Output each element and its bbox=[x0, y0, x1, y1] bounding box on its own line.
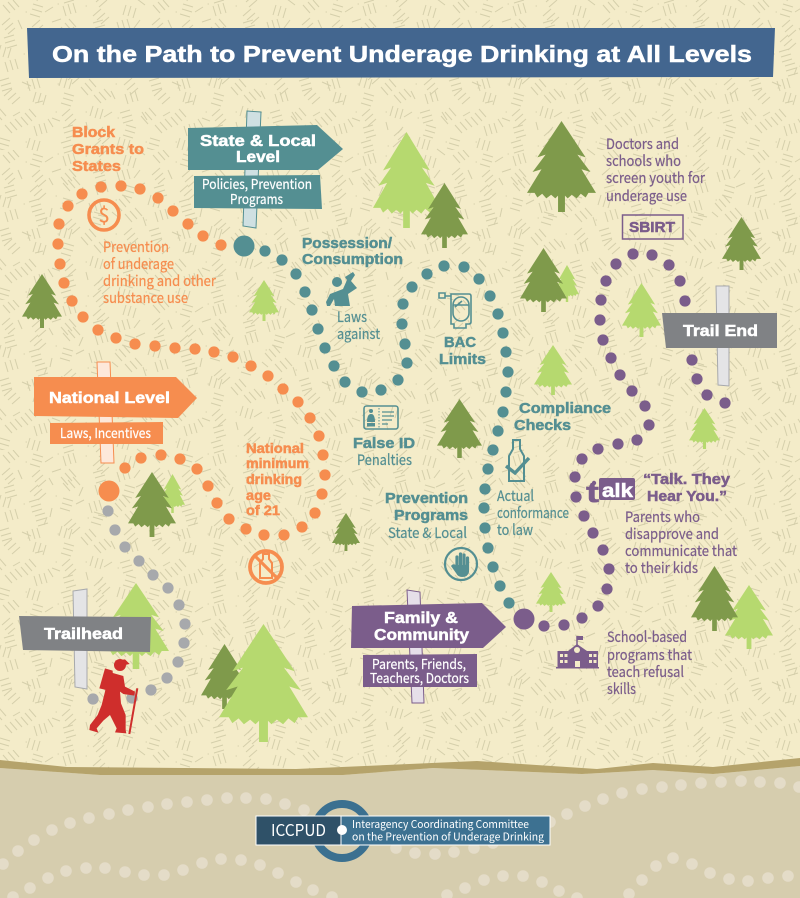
ICCPUD logo bbox=[256, 804, 550, 858]
text: actual conformance to law bbox=[497, 485, 569, 540]
sign: State & Local Level bbox=[188, 111, 343, 228]
text: school-based programs: School-based bbox=[607, 626, 687, 647]
text: prevention of underage drinking: drinking and other bbox=[103, 270, 216, 291]
text: actual conformance to law: Actual bbox=[497, 485, 534, 506]
text: national minimum drinking age: minimum bbox=[246, 455, 309, 471]
text: doctors and schools: schools who bbox=[606, 150, 681, 171]
text: laws against: against bbox=[337, 323, 380, 344]
text: prevention programs: State & Local bbox=[388, 522, 467, 543]
text: Block Grants to States bbox=[72, 125, 144, 175]
text: prevention of underage drinking: Prevention bbox=[103, 236, 169, 257]
icon: no alcohol bottle bbox=[250, 551, 282, 583]
icon: breathalyzer bbox=[439, 293, 471, 328]
icon: ID card bbox=[364, 406, 398, 429]
ICCPUD logo: Interagency Coordinating Committee bbox=[352, 817, 529, 832]
text: compliance checks bbox=[514, 401, 611, 434]
text: school-based programs: programs that bbox=[607, 644, 692, 665]
icon: bottle with check mark bbox=[506, 440, 529, 481]
text: prevention programs bbox=[385, 491, 468, 543]
sign: Family & Community: Parents, Friends, bbox=[372, 653, 466, 673]
text: national minimum drinking age bbox=[246, 440, 309, 518]
sign: State & Local Level: State & Local bbox=[200, 133, 316, 150]
text: parents who disapprove: to their kids bbox=[625, 557, 698, 578]
text: Talk. They Hear You.: “Talk. They bbox=[643, 472, 730, 488]
icon: dollar coin: $ bbox=[98, 199, 110, 228]
sign: Trailhead bbox=[19, 589, 151, 689]
text: school-based programs: skills bbox=[607, 678, 636, 699]
sign: National Level bbox=[34, 362, 197, 463]
text: BAC limits: Limits bbox=[439, 352, 486, 368]
text: actual conformance to law: to law bbox=[497, 519, 533, 540]
text: parents who disapprove: disapprove and bbox=[625, 523, 719, 544]
text: parents who disapprove bbox=[625, 506, 737, 578]
text: laws against: Laws bbox=[337, 306, 367, 327]
sign: Family & Community: Community bbox=[374, 627, 469, 644]
icon: person drinking from bottle bbox=[326, 272, 357, 306]
text: Block Grants to States: Block bbox=[72, 125, 116, 141]
gray dotted trail from trailhead bbox=[87, 505, 191, 705]
text: laws against bbox=[337, 306, 380, 344]
text: actual conformance to law: conformance bbox=[497, 502, 569, 523]
teal dotted trail: state and local bbox=[234, 236, 515, 609]
text: Block Grants to States: Grants to bbox=[72, 142, 144, 158]
text: parents who disapprove: communicate that bbox=[625, 540, 737, 561]
text: prevention of underage drinking bbox=[103, 236, 216, 308]
text: False ID penalties bbox=[353, 435, 415, 470]
orange dotted trail: national level bbox=[52, 180, 331, 541]
title banner bbox=[27, 28, 775, 78]
text: Talk. They Hear You. bbox=[643, 472, 730, 505]
label box: SBIRT bbox=[622, 215, 683, 239]
text: possession / consumption: Consumption bbox=[302, 252, 403, 268]
text: BAC limits: BAC bbox=[444, 335, 477, 351]
sign: Trail End bbox=[662, 286, 777, 386]
icon: school building bbox=[556, 636, 599, 668]
sign: Family & Community: Teachers, Doctors bbox=[370, 667, 469, 687]
sign: State & Local Level: Policies, Prevention bbox=[202, 173, 312, 193]
sign: State & Local Level: Level bbox=[236, 149, 280, 166]
text: Block Grants to States: States bbox=[72, 159, 121, 175]
text: False ID penalties: Penalties bbox=[357, 449, 412, 470]
purple dotted trail: family and community bbox=[514, 248, 731, 632]
sign: State & Local Level: Programs bbox=[230, 188, 283, 208]
sign: Family & Community: Family & bbox=[384, 610, 458, 627]
text: prevention programs: Prevention bbox=[385, 491, 468, 507]
icon: talk logo: t bbox=[586, 477, 599, 509]
pine trees bbox=[22, 121, 773, 742]
text: prevention of underage drinking: of underage bbox=[103, 253, 174, 274]
text: False ID penalties: False ID bbox=[353, 435, 415, 452]
text: national minimum drinking age: drinking bbox=[246, 471, 302, 487]
text: prevention of underage drinking: substance use bbox=[103, 287, 188, 308]
ICCPUD logo: on the Prevention of Underage Drinking bbox=[352, 830, 544, 844]
icon: talk logo: alk bbox=[602, 481, 633, 502]
text: compliance checks: Compliance bbox=[519, 401, 611, 417]
text: school-based programs: teach refusal bbox=[607, 661, 684, 682]
text: national minimum drinking age: age bbox=[246, 487, 271, 503]
text: doctors and schools bbox=[606, 133, 705, 206]
sign: Trailhead: Trailhead bbox=[44, 626, 123, 643]
text: BAC limits bbox=[439, 335, 486, 368]
icon: talk logo bbox=[586, 477, 635, 509]
text: doctors and schools: screen youth for bbox=[606, 167, 705, 188]
text: Talk. They Hear You.: Hear You.” bbox=[647, 489, 727, 505]
text: possession / consumption bbox=[302, 236, 403, 268]
text: possession / consumption: Possession/ bbox=[302, 236, 392, 252]
text: doctors and schools: underage use bbox=[606, 185, 687, 206]
icon: red hiker bbox=[89, 659, 137, 734]
sign: National Level: National Level bbox=[49, 390, 170, 407]
sign: National Level: Laws, Incentives bbox=[60, 422, 151, 442]
text: compliance checks: Checks bbox=[514, 418, 571, 434]
ground strip with footer trail bbox=[0, 758, 800, 898]
label box: SBIRT: SBIRT bbox=[629, 220, 675, 236]
text: national minimum drinking age: National bbox=[246, 440, 304, 456]
sign: Family & Community bbox=[351, 590, 506, 703]
text: school-based programs bbox=[607, 626, 692, 699]
text: parents who disapprove: Parents who bbox=[625, 506, 700, 527]
sign: Trail End: Trail End bbox=[683, 323, 758, 340]
ICCPUD logo: ICCPUD bbox=[271, 817, 326, 841]
icon: stop hand bbox=[445, 548, 477, 580]
title banner: On the Path to Prevent Underage Drinking at All Levels bbox=[52, 41, 752, 67]
text: prevention programs: Programs bbox=[394, 508, 468, 524]
text: national minimum drinking age: of 21 bbox=[246, 502, 280, 518]
icon: dollar coin bbox=[89, 199, 119, 230]
text: doctors and schools: Doctors and bbox=[606, 133, 679, 154]
